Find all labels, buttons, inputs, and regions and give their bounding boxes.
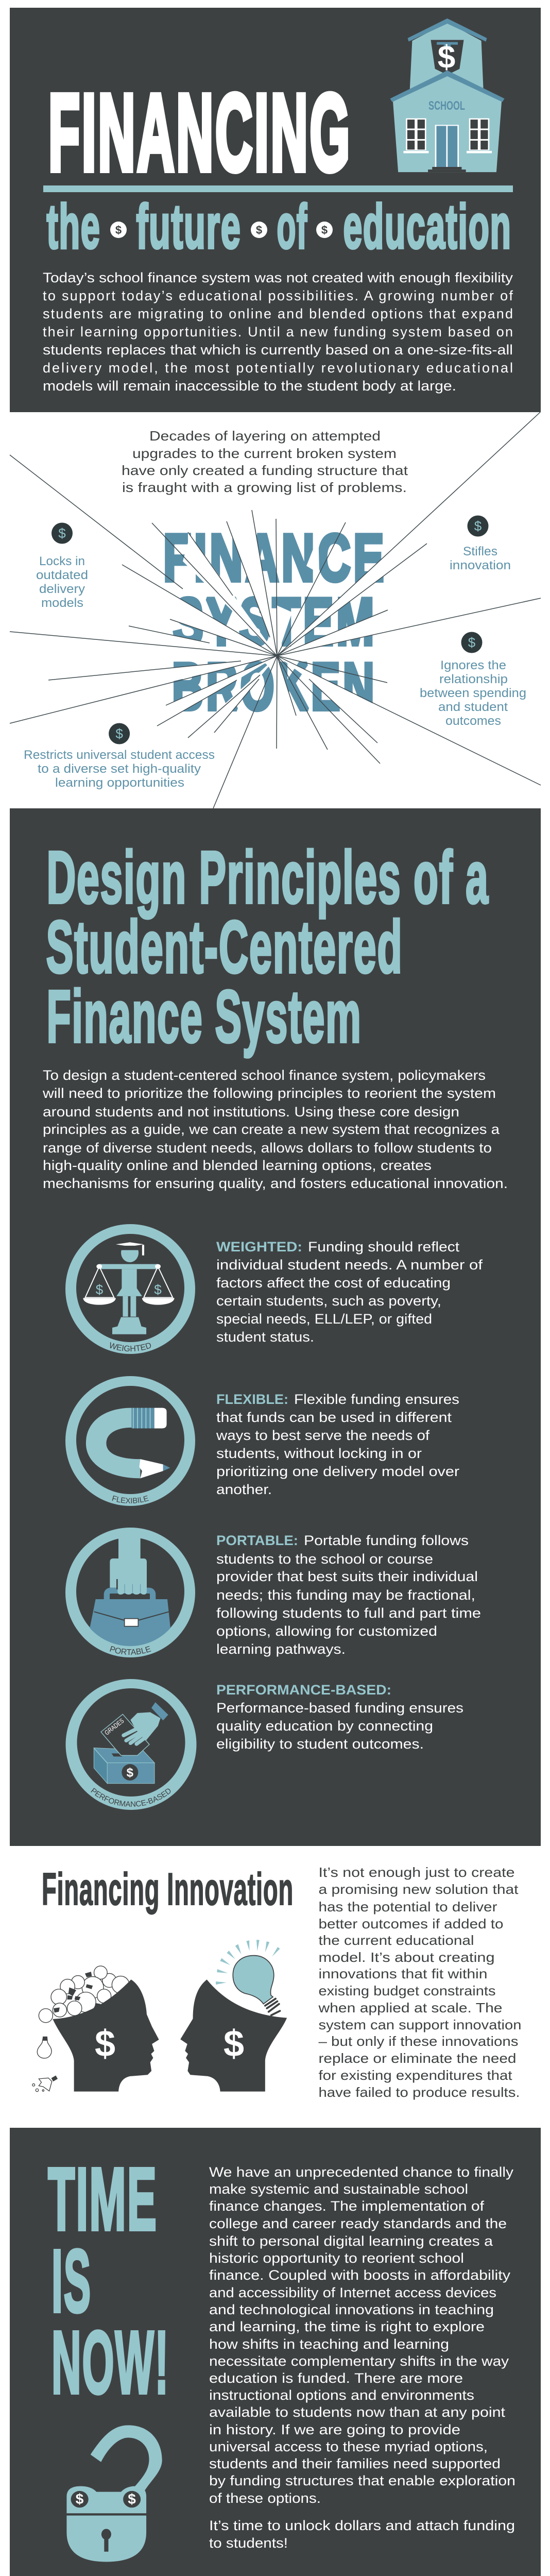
text: weighted: certain students, such as poverty,	[216, 1293, 441, 1309]
problem: ignores spending and outcomes relationship: and student	[438, 700, 508, 714]
illustration: crowded head of bulbs	[32, 1966, 159, 2092]
innovation paragraph: innovations that fit within	[318, 1966, 487, 1981]
text: performance-based: Performance-based funding ensures	[216, 1700, 463, 1716]
text: portable: Portable funding follows	[304, 1533, 469, 1548]
time is now paragraph: finance. Coupled with boosts in affordability	[209, 2267, 511, 2283]
panel: design principles background	[10, 808, 541, 1846]
illustration: head with single bright bulb: $	[224, 2023, 244, 2064]
broken system intro text: upgrades to the current broken system	[132, 446, 397, 461]
heading: finance system broken, shattered: FINANCE	[163, 521, 387, 595]
intro paragraph: students are migrating to online and blended options that expand	[43, 306, 513, 321]
icon: performance-based badge: GRADES	[104, 1717, 125, 1737]
problem: restricts universal student access: learning opportunities	[55, 776, 184, 790]
heading: time is now: TIME	[48, 2149, 158, 2249]
icon: schoolhouse	[390, 19, 505, 172]
problem: stifles innovation: Stifles	[463, 545, 497, 558]
school sign: SCHOOL	[428, 99, 465, 113]
innovation paragraph: when applied at scale. The	[318, 2000, 503, 2015]
heading: finance system broken, shattered: SYSTEM	[173, 585, 377, 659]
intro paragraph: their learning opportunities. Until a new funding system based on	[43, 324, 513, 340]
text: flexible: FLEXIBLE:	[216, 1392, 288, 1407]
time is now paragraph	[209, 2164, 515, 2551]
text: performance-based: PERFORMANCE-BASED:	[216, 1682, 391, 1698]
time is now paragraph: education is funded. There are more	[209, 2370, 463, 2386]
design principles paragraph: high-quality online and blended learning options, creates	[43, 1158, 432, 1173]
icon: unlocked padlock	[66, 2425, 162, 2562]
panel: intro background	[10, 8, 541, 412]
intro paragraph: Today’s school finance system was not created with enough flexibility	[43, 270, 513, 285]
text: flexible: prioritizing one delivery model over	[216, 1464, 459, 1479]
problem: locks in outdated delivery models: models	[41, 596, 83, 610]
intro paragraph: delivery model, the most potentially revolutionary educational	[43, 360, 513, 376]
innovation paragraph: replace or eliminate the need	[318, 2050, 516, 2066]
icon: flexible badge: FLEXIBILE	[112, 1495, 149, 1503]
time is now paragraph: It’s time to unlock dollars and attach funding	[209, 2518, 515, 2533]
innovation paragraph: have failed to produce results.	[318, 2084, 520, 2100]
heading: time is now	[48, 2149, 169, 2412]
icon: dollar coin 2: $	[256, 224, 262, 236]
problem: locks in outdated delivery models	[36, 522, 88, 610]
innovation paragraph: model. It’s about creating	[318, 1950, 494, 1965]
text: portable	[216, 1533, 481, 1657]
design principles paragraph: mechanisms for ensuring quality, and fosters educational innovation.	[43, 1176, 508, 1191]
problem: ignores spending and outcomes relationship: relationship	[439, 672, 508, 686]
icon: portable badge	[65, 1528, 195, 1657]
design principles paragraph: range of diverse student needs, allows dollars to follow students to	[43, 1140, 492, 1156]
time is now paragraph: and accessibility of Internet access devices	[209, 2285, 496, 2300]
text: flexible: ways to best serve the needs of	[216, 1428, 430, 1443]
problem: restricts universal student access: $	[115, 726, 123, 741]
problem: stifles innovation: $	[474, 518, 482, 534]
problem: locks in outdated delivery models: outdated	[36, 568, 88, 582]
intro paragraph: students replaces that which is currently based on a one-size-fits-all	[43, 342, 513, 358]
intro paragraph: to support today’s educational possibilities. A growing number of	[43, 288, 513, 303]
text: weighted: WEIGHTED:	[216, 1239, 302, 1255]
text: portable: PORTABLE:	[216, 1533, 298, 1548]
time is now paragraph: in history. If we are going to provide	[209, 2422, 460, 2437]
innovation paragraph: a promising new solution that	[318, 1882, 519, 1897]
problem: ignores spending and outcomes relationship: outcomes	[445, 714, 501, 728]
time is now paragraph: universal access to these myriad options,	[209, 2439, 488, 2454]
icon: portable badge: PORTABLE	[110, 1646, 151, 1655]
design principles paragraph: principles as a guide, we can create a new system that recognizes a	[43, 1122, 500, 1137]
design principles paragraph: To design a student-centered school finance system, policymakers	[43, 1067, 486, 1083]
innovation paragraph: existing budget constraints	[318, 1983, 495, 1998]
time is now paragraph: and learning, the time is right to explore	[209, 2319, 485, 2334]
text: portable: provider that best suits their individual	[216, 1569, 478, 1584]
text: flexible: students, without locking in or	[216, 1446, 422, 1461]
icon: performance-based badge	[66, 1679, 197, 1810]
innovation paragraph: – but only if these innovations	[318, 2033, 518, 2049]
text: flexible: that funds can be used in different	[216, 1410, 452, 1425]
icon: performance-based badge: PERFORMANCE-BASED	[91, 1788, 171, 1807]
illustration: crowded head of bulbs: $	[95, 2023, 115, 2064]
time is now paragraph: and technological innovations in teaching	[209, 2302, 494, 2317]
broken system intro text: is fraught with a growing list of problems.	[122, 480, 407, 495]
text: portable: following students to full and part time	[216, 1605, 481, 1621]
subtitle: the future of education: future	[136, 192, 241, 262]
problem: locks in outdated delivery models: $	[58, 526, 66, 541]
innovation paragraph: has the potential to deliver	[318, 1899, 497, 1914]
innovation paragraph: It’s not enough just to create	[318, 1865, 515, 1880]
design principles paragraph: will need to prioritize the following principles to reorient the system	[42, 1086, 496, 1101]
text: flexible: Flexible funding ensures	[294, 1392, 459, 1407]
text: weighted: Funding should reflect	[308, 1239, 460, 1255]
problem: locks in outdated delivery models: Locks in	[39, 554, 85, 568]
time is now paragraph: of these options.	[209, 2490, 321, 2506]
icon: dollar coin 1	[110, 222, 127, 238]
time is now paragraph: necessitate complementary shifts in the way	[209, 2353, 509, 2369]
heading: finance system broken, shattered: BROKEN	[172, 650, 377, 724]
icon: performance-based badge: $	[127, 1766, 133, 1780]
design principles paragraph	[42, 1067, 508, 1191]
problem: restricts universal student access: Restricts universal student access	[24, 748, 215, 762]
broken system intro text	[122, 428, 408, 495]
text: weighted: individual student needs. A number of	[216, 1257, 483, 1273]
icon: flexible badge	[65, 1376, 195, 1506]
text: performance-based: quality education by connecting	[216, 1718, 433, 1734]
illustration: head with single bright bulb	[180, 1940, 287, 2092]
time is now paragraph: historic opportunity to reorient school	[209, 2250, 464, 2266]
time is now paragraph: We have an unprecedented chance to finally	[209, 2164, 514, 2180]
icon: unlocked padlock: $	[76, 2491, 84, 2507]
text: flexible	[216, 1392, 459, 1497]
design principles paragraph: around students and not institutions. Using these core design	[43, 1104, 459, 1120]
innovation paragraph: for existing expenditures that	[318, 2067, 512, 2083]
text: weighted: student status.	[216, 1329, 314, 1345]
text: portable: students to the school or course	[216, 1551, 433, 1567]
problem: ignores spending and outcomes relationship: between spending	[420, 686, 526, 700]
icon: dollar coin 3	[316, 222, 333, 238]
problem: locks in outdated delivery models: delivery	[39, 582, 85, 596]
icon: weighted badge: WEIGHTED	[110, 1342, 151, 1352]
broken system intro text: have only created a funding structure that	[122, 463, 408, 478]
icon: weighted badge: $	[96, 1282, 104, 1297]
text: portable: options, allowing for customized	[216, 1623, 437, 1639]
icon: dollar in school tower: $	[438, 40, 455, 75]
time is now paragraph: finance changes. The implementation of	[209, 2198, 485, 2214]
problem: ignores spending and outcomes relationship	[420, 632, 526, 728]
innovation paragraph: better outcomes if added to	[318, 1916, 504, 1931]
text: weighted: special needs, ELL/LEP, or gifted	[216, 1311, 432, 1327]
subtitle: the future of education	[46, 192, 512, 262]
text: flexible: another.	[216, 1482, 272, 1497]
intro paragraph	[43, 270, 513, 394]
innovation paragraph: the current educational	[318, 1933, 474, 1948]
panel: time is now background	[10, 2128, 541, 2576]
icon: weighted badge	[65, 1224, 195, 1354]
time is now paragraph: to students!	[209, 2535, 288, 2551]
problem: restricts universal student access	[24, 723, 215, 790]
icon: dollar coin 2	[251, 222, 267, 238]
time is now paragraph: by funding structures that enable exploration	[209, 2473, 515, 2488]
text: performance-based	[216, 1682, 463, 1752]
divider bar	[43, 185, 513, 192]
innovation paragraph	[318, 1865, 521, 2100]
problem: stifles innovation: innovation	[450, 558, 511, 572]
icon: dollar coin 1: $	[115, 224, 122, 236]
time is now paragraph: how shifts in teaching and learning	[209, 2336, 449, 2352]
problem: stifles innovation	[450, 515, 511, 572]
text: weighted	[216, 1239, 483, 1345]
innovation paragraph: system can support innovation	[318, 2017, 521, 2032]
time is now paragraph: make systemic and sustainable school	[209, 2181, 468, 2197]
problem: restricts universal student access: to a diverse set high-quality	[38, 762, 201, 776]
text: portable: needs; this funding may be fractional,	[216, 1587, 475, 1603]
time is now paragraph: students and their families need supported	[209, 2456, 501, 2471]
text: portable: learning pathways.	[216, 1641, 346, 1657]
time is now paragraph: instructional options and environments	[209, 2387, 474, 2403]
time is now paragraph: college and career ready standards and the	[209, 2216, 507, 2231]
subtitle: the future of education: the	[46, 192, 101, 262]
problem: ignores spending and outcomes relationship: Ignores the	[440, 658, 506, 672]
heading: time is now: IS	[51, 2231, 92, 2331]
heading: finance system broken, shattered	[10, 412, 541, 808]
text: weighted: factors affect the cost of educating	[216, 1275, 451, 1291]
icon: unlocked padlock: $	[128, 2491, 136, 2507]
icon: dollar coin 3: $	[321, 224, 328, 236]
time is now paragraph: shift to personal digital learning creates a	[209, 2233, 493, 2249]
time is now paragraph: available to students now than at any point	[209, 2404, 506, 2420]
text: NOW!	[51, 2312, 169, 2412]
heading: design principles	[46, 836, 489, 1058]
heading: financing innovation: Financing Innovation	[42, 1863, 294, 1914]
intro paragraph: models will remain inaccessible to the student body at large.	[43, 378, 456, 394]
icon: weighted badge: $	[154, 1282, 162, 1297]
broken system intro text: Decades of layering on attempted	[149, 428, 381, 444]
text: performance-based: eligibility to student outcomes.	[216, 1736, 424, 1752]
problem: ignores spending and outcomes relationship: $	[468, 635, 476, 650]
subtitle: the future of education: of	[277, 192, 308, 262]
